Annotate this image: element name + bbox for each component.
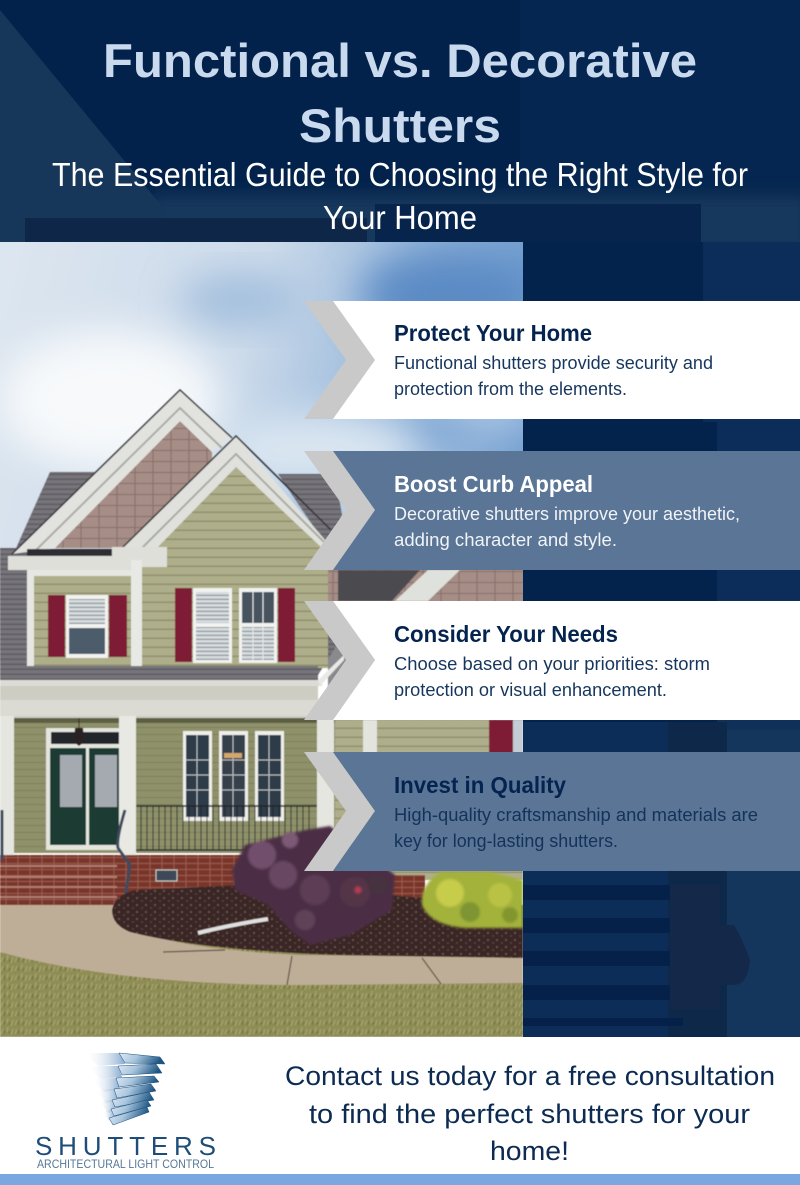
description: key for long-lasting shutters. (394, 831, 618, 851)
brick base and steps (0, 810, 425, 912)
call to action: Contact us today for a free consultation (285, 1061, 775, 1091)
description: High-quality craftsmanship and materials are (394, 805, 758, 825)
footer background (0, 1037, 800, 1174)
porch columns (0, 716, 334, 856)
icon: shutter slats (84, 1053, 165, 1125)
logo wordmark: SHUTTERS (35, 1131, 216, 1161)
banner (333, 451, 800, 570)
porch roof and beam (0, 655, 344, 718)
downspout pipe (198, 919, 268, 933)
title: Functional vs. Decorative (103, 34, 697, 87)
main gable (12, 390, 232, 554)
railing (136, 806, 317, 850)
banner (333, 301, 800, 419)
panel: invest in quality (304, 752, 800, 871)
heading: Consider Your Needs (394, 621, 618, 647)
subtitle: The Essential Guide to Choosing the Right Style for (52, 156, 748, 193)
ground: sidewalk, mulch, grass (0, 885, 523, 1037)
house photo (0, 242, 540, 1037)
description: Decorative shutters improve your aesthetic, (394, 504, 740, 524)
chevron (304, 301, 375, 419)
logo (35, 1053, 216, 1171)
heading: Boost Curb Appeal (394, 471, 593, 497)
side wing behind banners (328, 548, 523, 880)
description (394, 654, 710, 700)
yellow shrub (422, 872, 523, 928)
shutter photo: right dark panel (523, 242, 800, 1038)
heading: Protect Your Home (394, 320, 592, 346)
upper windows and shutters (48, 588, 295, 663)
front door (46, 718, 121, 850)
banner (333, 752, 800, 871)
subtitle (52, 156, 748, 236)
porch windows (183, 731, 284, 821)
title: Shutters (299, 99, 501, 152)
description: adding character and style. (394, 530, 617, 550)
porch wall (0, 718, 335, 853)
logo tagline: ARCHITECTURAL LIGHT CONTROL (37, 1157, 214, 1171)
front gable (27, 436, 332, 556)
roofs (0, 472, 342, 675)
call to action: home! (490, 1136, 569, 1166)
panel: boost curb appeal (304, 451, 800, 570)
subtitle: Your Home (323, 199, 477, 236)
title (103, 34, 697, 152)
description (394, 805, 758, 851)
heading: Invest in Quality (394, 772, 566, 798)
banner (333, 601, 800, 720)
call to action: to find the perfect shutters for your (309, 1099, 750, 1129)
description: protection or visual enhancement. (394, 680, 667, 700)
chevron (304, 601, 375, 720)
description: Choose based on your priorities: storm (394, 654, 710, 674)
header background (0, 0, 800, 254)
purple shrub (232, 826, 395, 945)
description (394, 504, 740, 550)
description (394, 353, 713, 399)
chevron (304, 451, 375, 570)
panel: consider your needs (304, 601, 800, 720)
description: Functional shutters provide security and (394, 353, 713, 373)
bottom accent bar (0, 1174, 800, 1185)
sky (0, 242, 540, 662)
call to action (285, 1061, 775, 1166)
description: protection from the elements. (394, 379, 627, 399)
upper wall and trim (8, 547, 328, 668)
chevron (304, 752, 375, 871)
panel: protect your home (304, 301, 800, 419)
